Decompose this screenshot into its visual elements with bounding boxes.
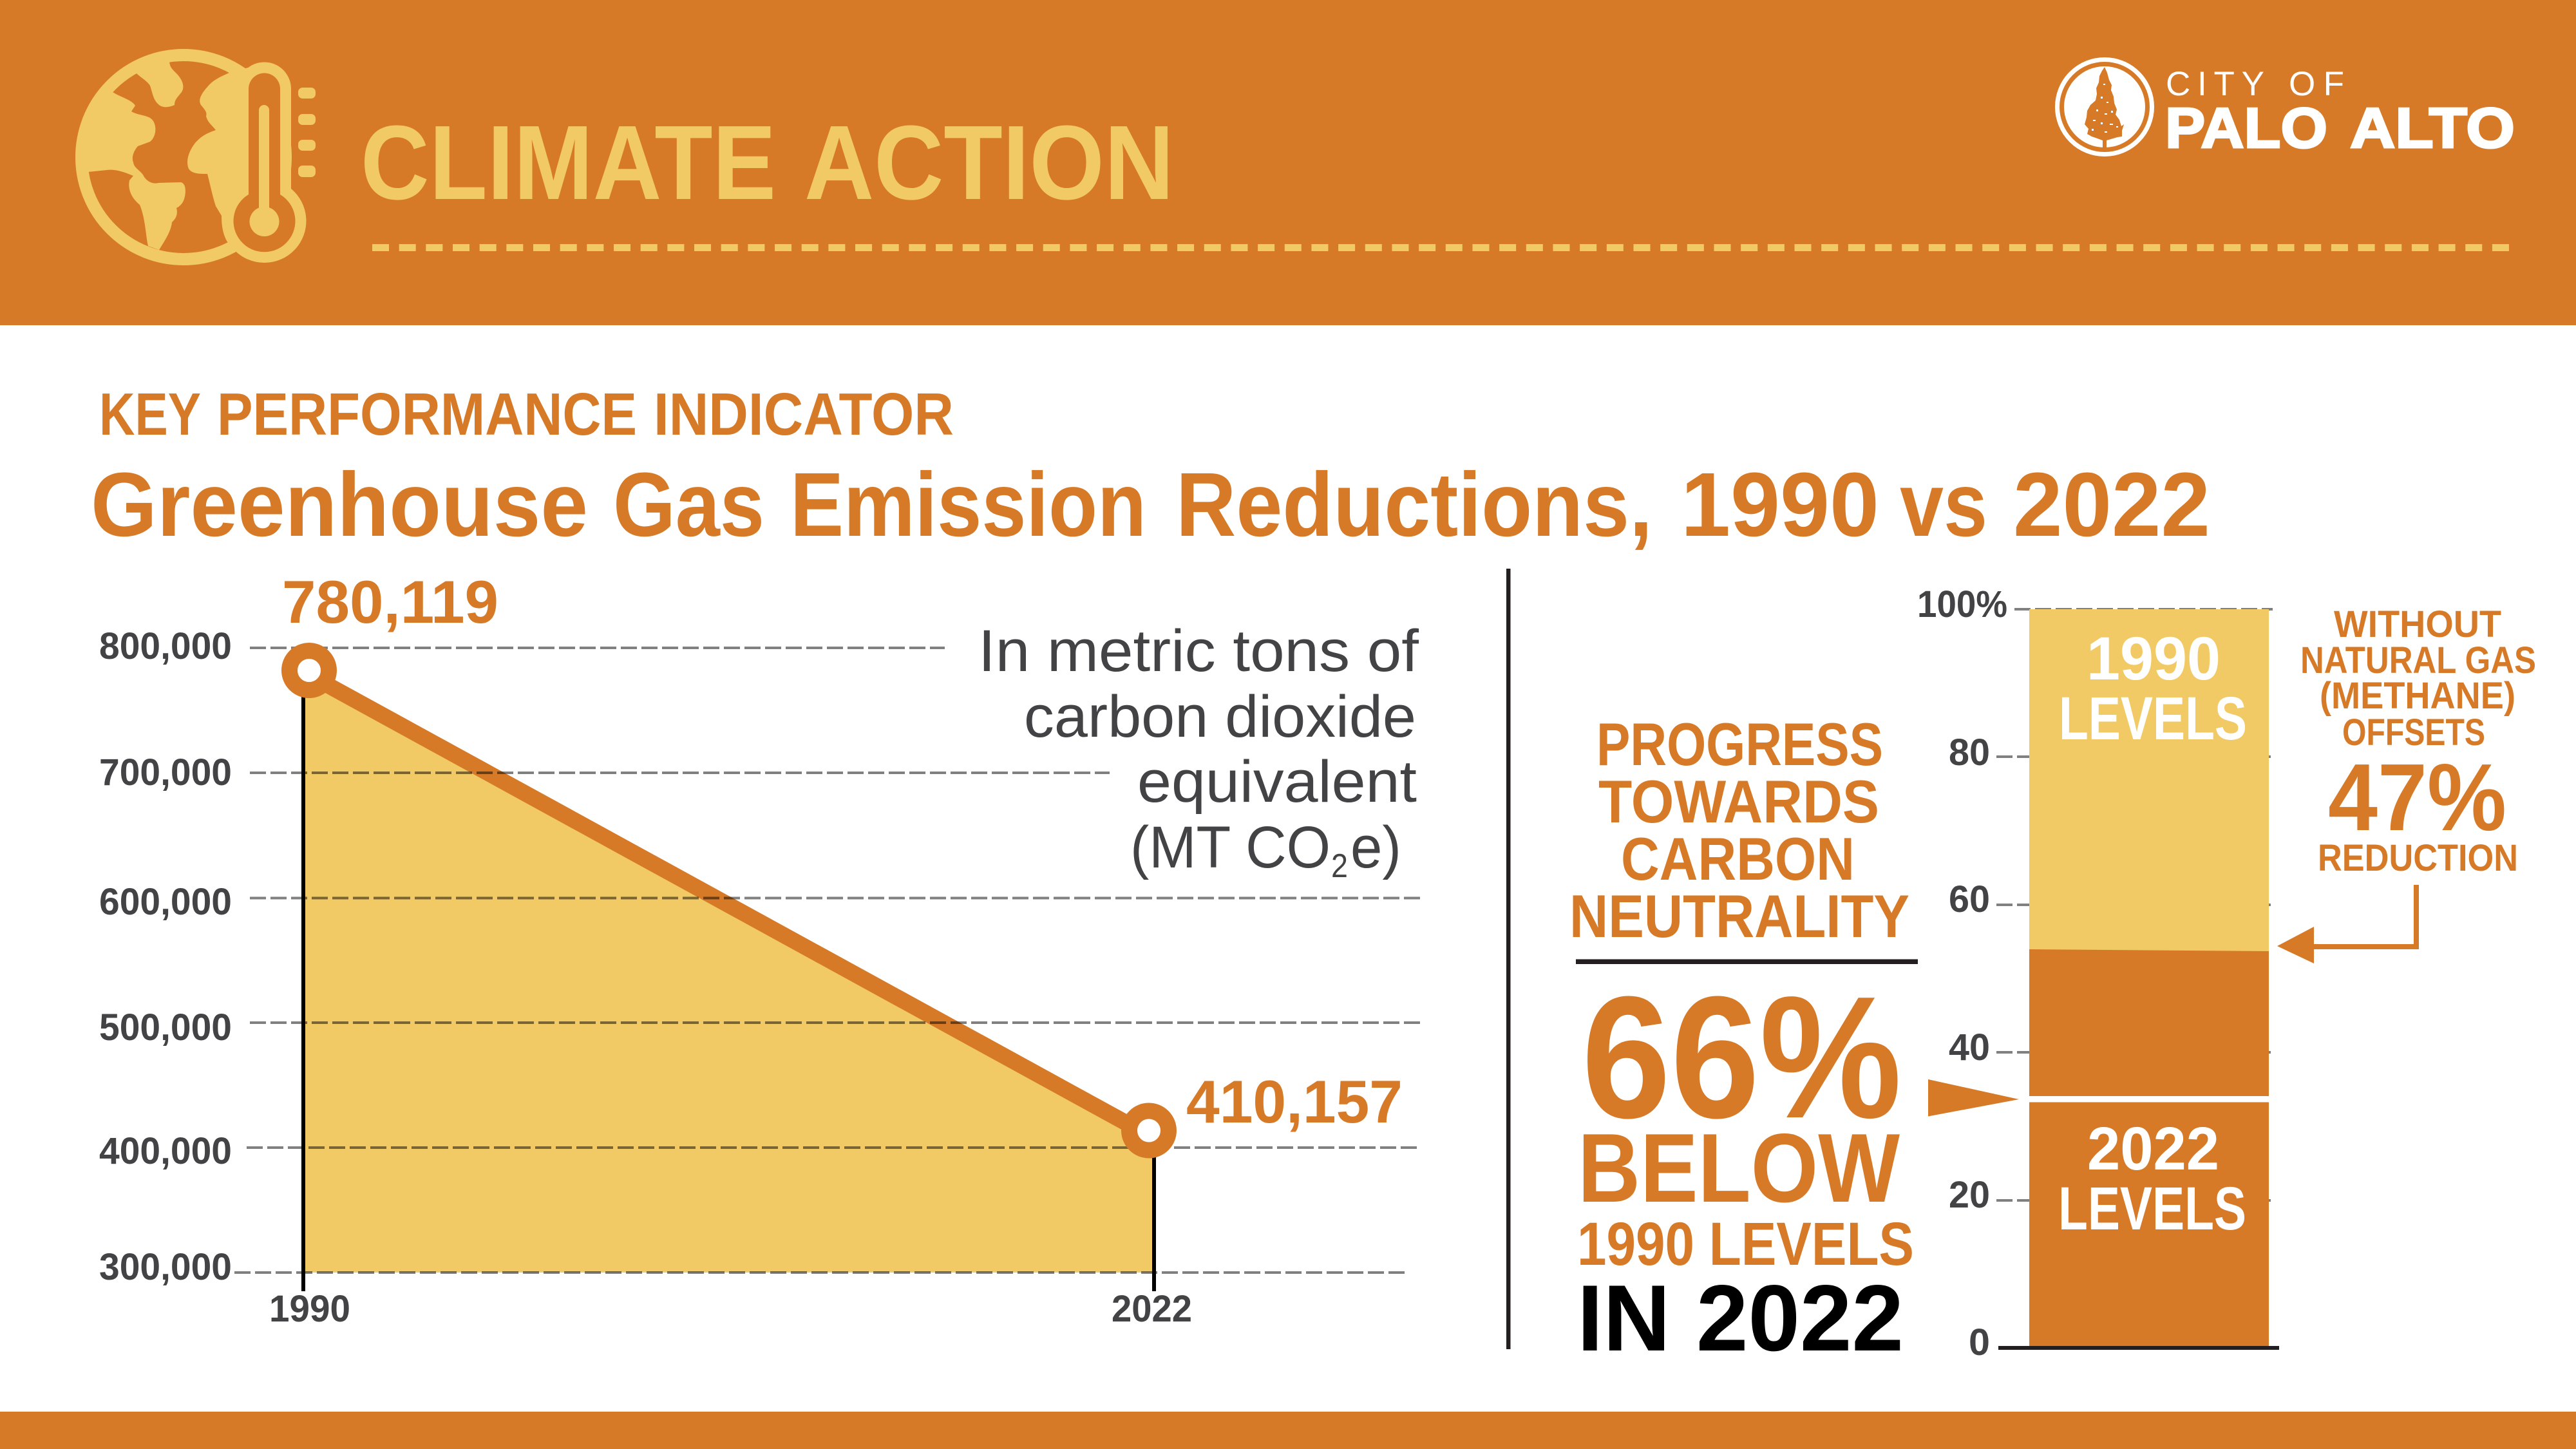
unit note: 2 bbox=[1331, 848, 1348, 885]
heading: greenhouse gas emission reductions: vs bbox=[1900, 453, 1987, 555]
progress heading: CARBON bbox=[1621, 825, 1855, 893]
heading: greenhouse gas emission reductions: Gas bbox=[613, 453, 764, 555]
unit note: (MT CO bbox=[1130, 815, 1331, 880]
rule bbox=[1576, 960, 1918, 964]
bar label: 2022 levels: LEVELS bbox=[2058, 1175, 2246, 1243]
data point 1990 bbox=[290, 650, 328, 690]
y axis labels: 500,000 bbox=[99, 1007, 232, 1048]
footer band bbox=[0, 1412, 2576, 1449]
stat text: 1990 levels: 1990 LEVELS bbox=[1577, 1210, 1914, 1278]
callout: without natural gas offsets bbox=[2277, 603, 2536, 963]
bar segment: 2022 levels bbox=[2029, 949, 2269, 1347]
value label 410,157: 410,157 bbox=[1186, 1068, 1403, 1135]
icon: globe with thermometer bbox=[80, 55, 316, 263]
heading: greenhouse gas emission reductions: Reductions, bbox=[1176, 453, 1653, 555]
chart area fill bbox=[305, 682, 1153, 1273]
y axis labels: 300,000 bbox=[99, 1246, 232, 1288]
progress heading: NEUTRALITY bbox=[1569, 882, 1909, 950]
bar segment: 1990 levels bbox=[2029, 609, 2269, 952]
heading: greenhouse gas emission reductions: 2022 bbox=[2013, 453, 2210, 555]
callout text: (METHANE) bbox=[2320, 675, 2515, 717]
stat text: below: BELOW bbox=[1578, 1113, 1900, 1223]
logo text: palo alto: PALO bbox=[2165, 96, 2327, 160]
heading: greenhouse gas emission reductions: Greenhouse bbox=[91, 453, 588, 555]
bar y axis labels: 0 bbox=[1969, 1321, 1990, 1363]
logo text: city of: OF bbox=[2289, 65, 2344, 103]
icon: tree bbox=[2085, 67, 2124, 147]
callout text: NATURAL GAS bbox=[2300, 639, 2536, 681]
heading: key performance indicator: PERFORMANCE bbox=[217, 381, 637, 448]
arrow: pointer to 2022 level bbox=[1928, 1079, 2019, 1117]
title: climate action: CLIMATE bbox=[361, 104, 776, 222]
stat: 66%: 66% bbox=[1582, 961, 1902, 1155]
y axis labels bbox=[99, 625, 232, 1288]
bar label: 2022 levels: 2022 bbox=[2087, 1115, 2219, 1183]
logo: city of palo alto bbox=[2057, 59, 2515, 160]
bar y axis labels: 40 bbox=[1949, 1027, 1990, 1068]
unit note bbox=[978, 618, 1419, 885]
bar label: 1990 levels: LEVELS bbox=[2059, 685, 2247, 753]
stat text: in 2022: IN 2022 bbox=[1577, 1265, 1904, 1370]
heading: greenhouse gas emission reductions: 1990 bbox=[1681, 453, 1879, 555]
bar label: 1990 levels bbox=[2059, 625, 2247, 753]
data point 2022 bbox=[1130, 1111, 1168, 1150]
bar y axis labels: 20 bbox=[1949, 1174, 1990, 1216]
y axis labels: 400,000 bbox=[99, 1130, 232, 1172]
unit note: e) bbox=[1350, 815, 1401, 880]
bar label: 2022 levels bbox=[2058, 1115, 2246, 1243]
y axis labels: 700,000 bbox=[99, 752, 232, 793]
panel: stacked bar bbox=[1917, 583, 2279, 1363]
x axis label 1990: 1990 bbox=[269, 1288, 350, 1330]
progress heading bbox=[1569, 710, 1909, 950]
chart trend line bbox=[309, 675, 1149, 1135]
title: climate action bbox=[361, 104, 1174, 222]
logo text: city of bbox=[2166, 65, 2344, 103]
panel: area line chart bbox=[99, 568, 1421, 1330]
bar gridlines bbox=[1996, 609, 2273, 1200]
panel: progress callout bbox=[1569, 710, 2019, 1370]
header dashed rule bbox=[372, 244, 2509, 251]
bar y axis labels bbox=[1917, 583, 2007, 1363]
y axis labels: 600,000 bbox=[99, 881, 232, 923]
year drop lines bbox=[301, 696, 1156, 1291]
logo text: palo alto bbox=[2165, 96, 2515, 160]
header band bbox=[0, 0, 2576, 325]
bar label: 1990 levels: 1990 bbox=[2087, 625, 2221, 693]
bar y axis labels: 80 bbox=[1949, 732, 1990, 773]
heading: key performance indicator bbox=[99, 381, 954, 448]
stat: 47%: 47% bbox=[2328, 744, 2506, 851]
stat text: reduction: REDUCTION bbox=[2318, 837, 2518, 879]
callout text bbox=[2300, 603, 2536, 753]
bar y axis labels: 60 bbox=[1949, 878, 1990, 920]
unit note: equivalent bbox=[1137, 749, 1417, 815]
chart gridlines bbox=[234, 648, 1421, 1273]
unit note: carbon dioxide bbox=[1024, 684, 1416, 750]
progress heading: TOWARDS bbox=[1598, 768, 1879, 835]
unit note: In metric tons of bbox=[978, 618, 1419, 684]
level marker line bbox=[2029, 1096, 2269, 1103]
callout text: WITHOUT bbox=[2334, 603, 2501, 645]
panel divider bbox=[1506, 569, 1511, 1349]
heading: greenhouse gas emission reductions bbox=[91, 453, 2210, 555]
y axis labels: 800,000 bbox=[99, 625, 232, 667]
logo text: palo alto: ALTO bbox=[2350, 96, 2515, 160]
value label 780,119: 780,119 bbox=[282, 568, 498, 636]
callout text: OFFSETS bbox=[2342, 712, 2485, 753]
heading: greenhouse gas emission reductions: Emission bbox=[790, 453, 1146, 555]
logo text: city of: CITY bbox=[2166, 65, 2264, 103]
x axis label 2022: 2022 bbox=[1112, 1288, 1192, 1330]
progress heading: PROGRESS bbox=[1596, 710, 1883, 778]
bar y axis labels: 100% bbox=[1917, 583, 2007, 625]
title: climate action: ACTION bbox=[804, 104, 1174, 222]
bar baseline bbox=[1998, 1346, 2279, 1350]
arrow: pointer to bar bbox=[2277, 885, 2416, 963]
heading: key performance indicator: KEY bbox=[99, 381, 201, 448]
heading: key performance indicator: INDICATOR bbox=[654, 381, 954, 448]
